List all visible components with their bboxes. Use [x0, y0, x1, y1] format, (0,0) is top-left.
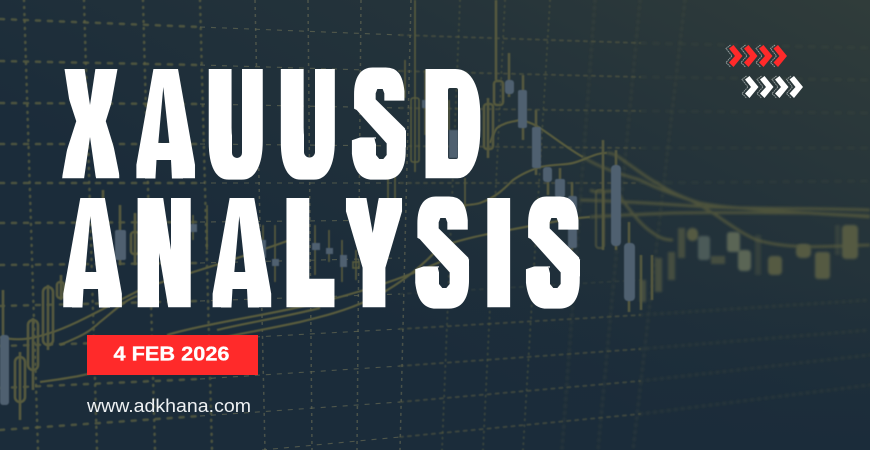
blurred distant candlesticks [640, 225, 858, 302]
date badge: 4 FEB 2026 [114, 344, 230, 366]
date badge [87, 335, 258, 375]
right descending candlesticks [484, 0, 652, 312]
title: XAUUSD ANALYSIS [62, 68, 580, 309]
grid: middle sharp section [200, 0, 411, 450]
grid: left heavy section [0, 0, 212, 450]
title line 2: ANALYSIS [68, 175, 576, 331]
website url: www.adkhana.com [86, 396, 251, 416]
left and centre candlesticks [0, 0, 465, 420]
moving average lines [0, 120, 607, 382]
icon: red chevron arrows [726, 44, 787, 67]
title line 1: XAUUSD [68, 46, 477, 202]
icon: white chevron arrows [742, 76, 803, 98]
grid: right fading section [400, 0, 640, 450]
